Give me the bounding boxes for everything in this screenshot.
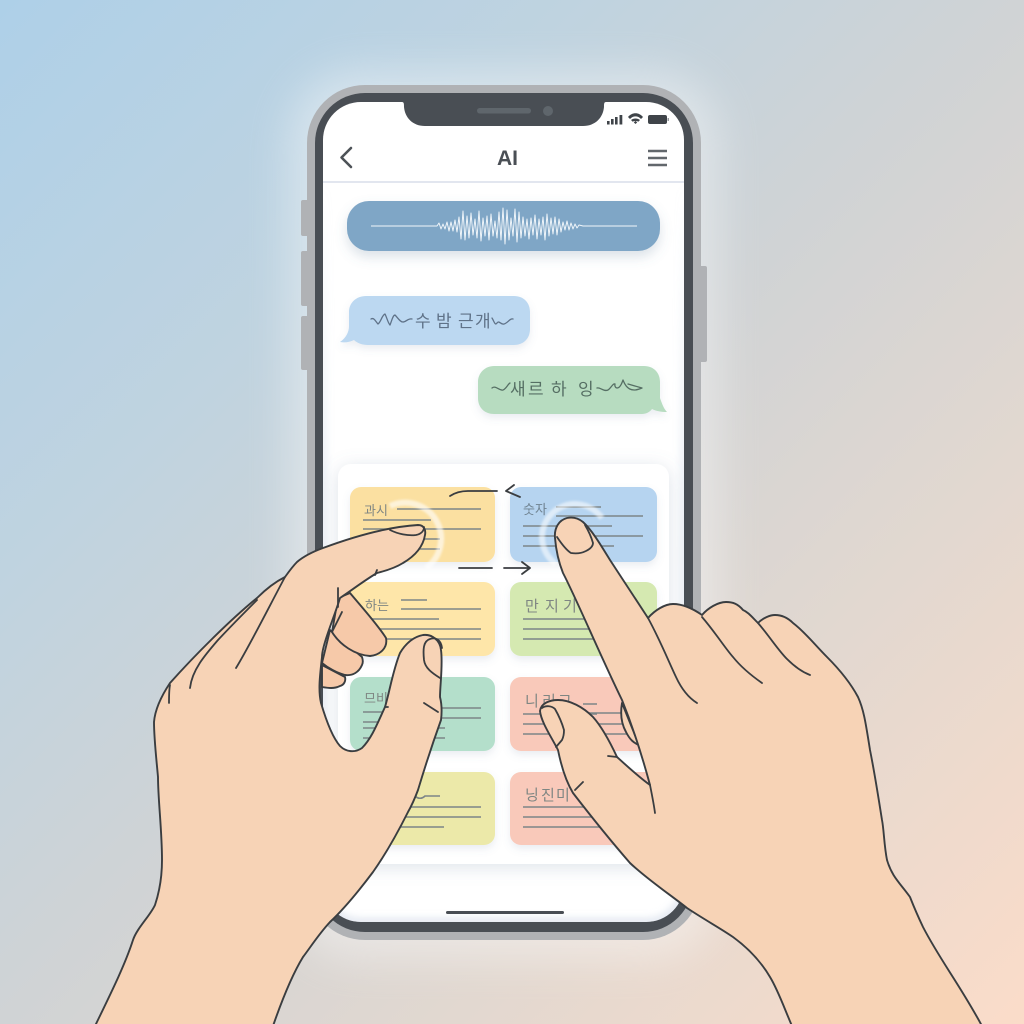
side buttons xyxy=(301,200,707,370)
phone bezel xyxy=(315,93,693,932)
card: blue top right: 숫자 xyxy=(523,502,547,517)
chat bubble: reply: 새르하잉 xyxy=(510,380,594,399)
notch xyxy=(402,102,606,126)
left hand xyxy=(95,525,442,1024)
chat bubble: incoming: 수밤근개 xyxy=(415,312,491,331)
hidden middle finger xyxy=(621,703,639,745)
card: yellow top left: 과시 xyxy=(364,503,388,518)
phone glow xyxy=(288,70,720,960)
header back arrow xyxy=(342,148,351,167)
chat bubble: reply xyxy=(478,366,667,414)
card: blue top right xyxy=(510,487,657,562)
card: salmon third row: 니리그 xyxy=(525,693,572,710)
right hand xyxy=(540,518,982,1024)
curled fingers xyxy=(322,593,386,688)
screen xyxy=(323,102,684,922)
card: salmon fourth row: 닝진미 xyxy=(525,787,570,804)
card: green second row xyxy=(510,582,657,656)
card: yellow top left xyxy=(350,487,495,562)
touch ripple: left xyxy=(390,503,441,568)
touch ripple: right xyxy=(542,504,602,564)
card: salmon third row xyxy=(510,677,657,751)
card: yellow second row: 하는 xyxy=(365,598,389,613)
speaker and camera xyxy=(477,106,553,116)
swap arrow: rightward xyxy=(459,562,530,574)
card panel xyxy=(338,464,669,864)
creases and nails xyxy=(542,525,810,813)
card: teal third row xyxy=(350,677,495,751)
card: green second row: 만지기 xyxy=(525,598,577,615)
swap arrow: leftward xyxy=(450,485,520,497)
smartphone xyxy=(301,85,707,940)
header title: AI xyxy=(497,147,518,170)
menu icon xyxy=(648,151,667,165)
chat bubble: incoming xyxy=(340,296,530,345)
card: lime fourth row xyxy=(350,772,495,845)
phone body xyxy=(307,85,701,940)
card: yellow second row xyxy=(350,582,495,656)
hand outline xyxy=(540,518,982,1024)
home indicator xyxy=(446,911,564,914)
creases and nails xyxy=(169,527,442,712)
card: salmon fourth row xyxy=(510,772,657,845)
palm and thumb outline xyxy=(95,525,442,1024)
status icons xyxy=(607,113,669,124)
voice waveform bar xyxy=(347,201,660,251)
card: teal third row: 므비 xyxy=(364,691,388,706)
